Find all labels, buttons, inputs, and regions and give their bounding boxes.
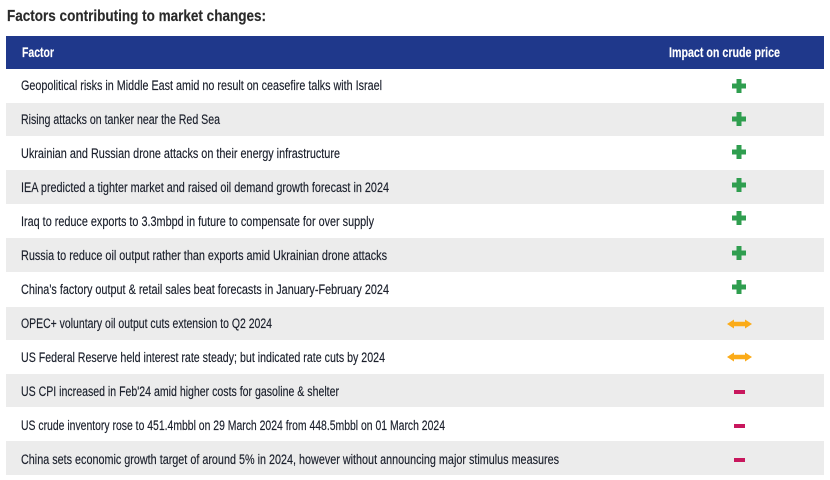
table header: [6, 36, 824, 69]
row 3: Ukrainian and Russian drone attacks on their energy infrastructure: [21, 146, 340, 161]
row 7: China's factory output & retail sales beat forecasts in January-February 2024: [21, 282, 389, 297]
row 3: [21, 145, 746, 161]
row 7: [21, 280, 746, 297]
row 2: [6, 103, 824, 136]
row 6: [6, 238, 824, 272]
row 12: China sets economic growth target of around 5% in 2024, however without announcing major stimulus measures: [21, 452, 559, 467]
row 9: [21, 350, 752, 365]
row 11: US crude inventory rose to 451.4mbbl on 29 March 2024 from 448.5mbbl on 01 March 2024: [21, 418, 445, 433]
title: Factors contributing to market changes:: [7, 8, 266, 25]
header: factor: Factor: [22, 44, 54, 60]
row 4: IEA predicted a tighter market and raised oil demand growth forecast in 2024: [21, 180, 389, 195]
row 10: US CPI increased in Feb'24 amid higher costs for gasoline & shelter: [21, 384, 339, 399]
row 1: [21, 78, 746, 93]
row 4: [6, 170, 824, 204]
row 5: Iraq to reduce exports to 3.3mbpd in future to compensate for over supply: [21, 214, 374, 229]
row 9: US Federal Reserve held interest rate steady; but indicated rate cuts by 2024: [21, 350, 385, 365]
row 10: [6, 374, 824, 407]
row 2: Rising attacks on tanker near the Red Sea: [21, 112, 220, 127]
row 12: [6, 441, 824, 475]
row 8: OPEC+ voluntary oil output cuts extension to Q2 2024: [21, 316, 272, 331]
row 6: Russia to reduce oil output rather than exports amid Ukrainian drone attacks: [21, 248, 387, 263]
row 1: Geopolitical risks in Middle East amid no result on ceasefire talks with Israel: [21, 78, 382, 93]
row 8: [6, 307, 824, 340]
header: impact on crude price: Impact on crude price: [669, 44, 780, 60]
row 5: [21, 211, 746, 229]
